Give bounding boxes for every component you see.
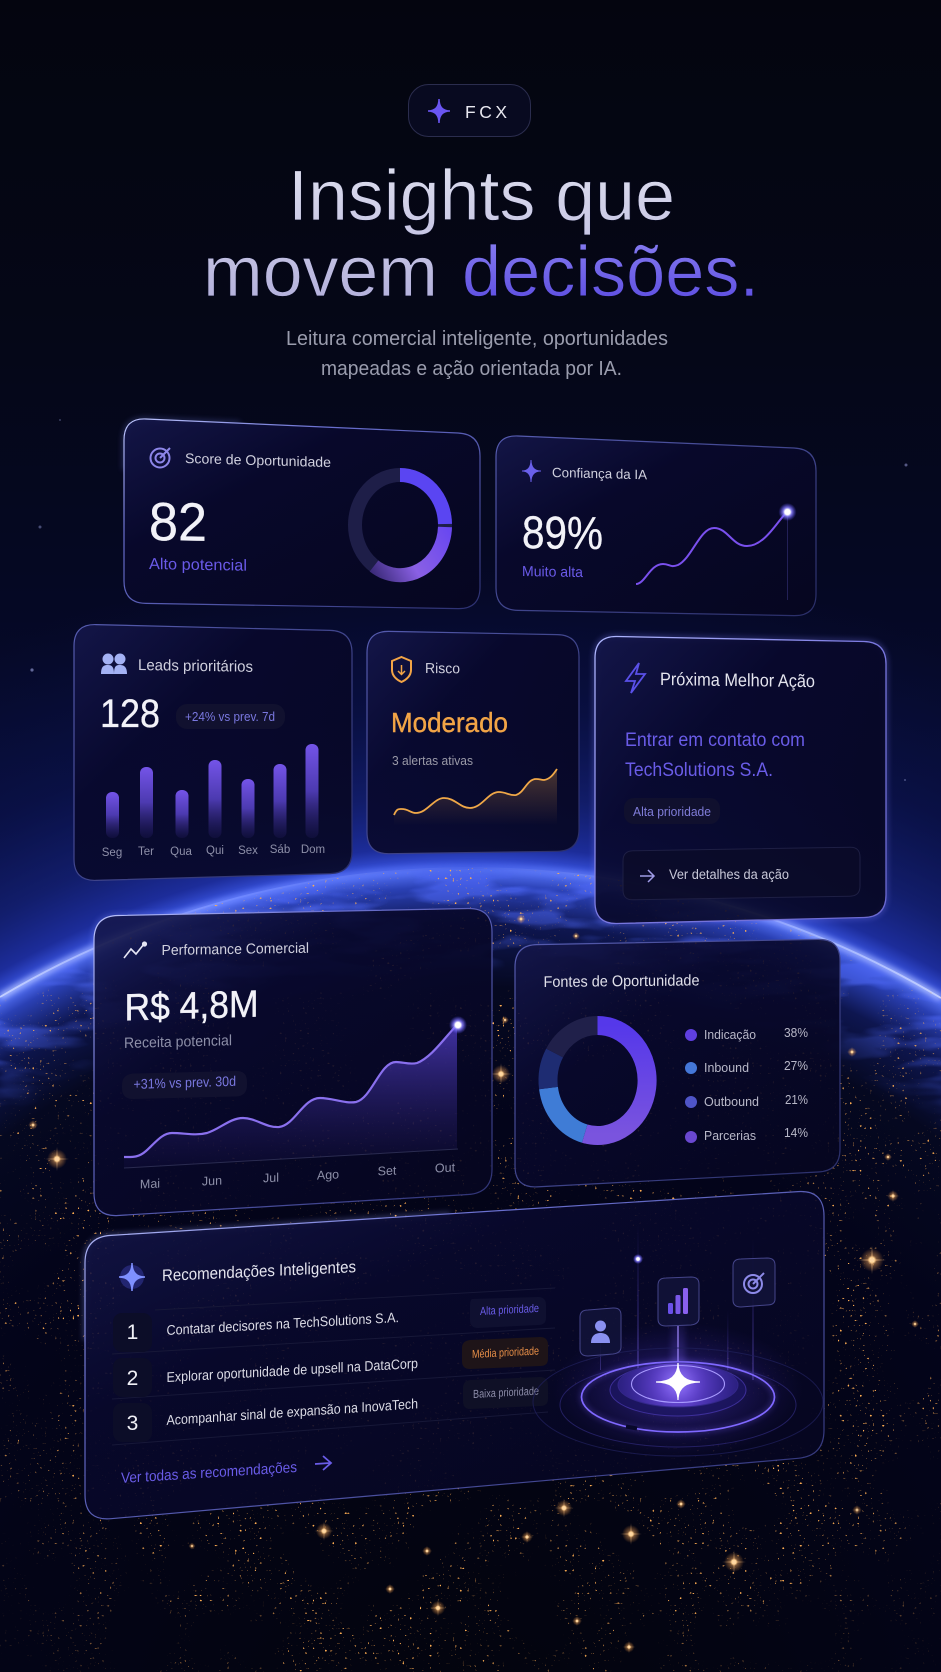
legend: Parcerias [704, 1128, 756, 1143]
earth globe [0, 868, 941, 1672]
action button [623, 847, 860, 900]
priority pill [624, 798, 720, 824]
status: Alto potencial [149, 556, 247, 575]
heading: Risco [425, 661, 460, 677]
icon: sparkle [428, 99, 450, 123]
legend: 14% [784, 1125, 808, 1140]
area chart [124, 1016, 467, 1168]
icon: sparkle badge [119, 1263, 145, 1291]
background stars [30, 419, 907, 781]
title: movem [203, 233, 438, 312]
recommendation: Entrar em contato com [625, 729, 805, 751]
bar labels: Qua [170, 846, 192, 858]
icon tile: person [580, 1308, 621, 1356]
action button: Ver detalhes da ação [669, 867, 789, 882]
legend: 38% [784, 1025, 808, 1040]
icon: lightning [626, 663, 645, 693]
legend: Indicação [704, 1027, 756, 1042]
row 3: 3 [127, 1412, 138, 1435]
growth pill [122, 1071, 247, 1099]
icon: shield [392, 657, 411, 682]
title: Insights que [288, 157, 675, 236]
light beams [600, 1225, 754, 1385]
caption: Receita potencial [124, 1032, 232, 1052]
legend: Inbound [704, 1060, 749, 1075]
panel: confiança da IA [496, 436, 816, 616]
priority pill: Alta prioridade [633, 805, 711, 819]
illustration: glowing platform [533, 1225, 823, 1458]
icon: arrow [640, 870, 654, 882]
row 1 [113, 1297, 546, 1352]
row 3: Baixa prioridade [473, 1386, 539, 1401]
recommendation: TechSolutions S.A. [625, 759, 773, 781]
month labels: Ago [317, 1167, 339, 1183]
row 2: Média prioridade [472, 1345, 539, 1361]
status: Muito alta [522, 564, 584, 581]
line chart [394, 769, 557, 825]
panel: leads prioritários [74, 625, 352, 880]
continent texture near the limb [0, 874, 941, 1112]
glowing dot [633, 1254, 643, 1264]
row dividers [112, 1288, 555, 1445]
icon tile: target [733, 1258, 775, 1307]
subtitle: Leitura comercial inteligente, oportunidades [286, 328, 668, 350]
row 1: 1 [127, 1321, 138, 1344]
bar labels: Seg [102, 847, 122, 859]
growth pill: +24% vs prev. 7d [185, 710, 275, 724]
row 3 [113, 1377, 548, 1442]
month labels: Mai [140, 1176, 160, 1192]
bar labels [102, 844, 325, 859]
panel: fontes de oportunidade [515, 939, 840, 1187]
row 2: Explorar oportunidade de upsell na DataCorp [166, 1355, 418, 1385]
bar labels: Ter [138, 846, 154, 858]
month labels: Jul [263, 1171, 279, 1185]
recommendation [625, 729, 805, 781]
subtitle: mapeadas e ação orientada por IA. [321, 358, 622, 380]
icon: sparkle [522, 460, 541, 482]
row 1: Alta prioridade [480, 1303, 539, 1318]
bar labels: Qui [206, 845, 224, 857]
value: 82 [149, 492, 207, 553]
line chart [636, 503, 796, 600]
heading: Performance Comercial [162, 941, 309, 959]
icon: people [101, 654, 127, 674]
row 2: 2 [127, 1367, 138, 1390]
month labels: Out [435, 1160, 456, 1176]
row 1: Contatar decisores na TechSolutions S.A. [166, 1309, 399, 1338]
growth pill [176, 704, 285, 729]
subtitle [286, 328, 668, 380]
panel: recomendações inteligentes [85, 1192, 824, 1519]
rings [533, 1348, 823, 1456]
value: Moderado [391, 707, 508, 738]
panel: próxima melhor ação [595, 636, 886, 924]
heading: Recomendações Inteligentes [162, 1258, 356, 1285]
bar chart [106, 744, 318, 838]
logo pill [408, 84, 530, 136]
legend: 27% [784, 1058, 808, 1073]
bar labels: Sáb [270, 844, 290, 856]
panel: risco [367, 631, 579, 854]
legend: Outbound [704, 1094, 759, 1109]
month labels: Jun [202, 1173, 222, 1189]
city lights [0, 860, 941, 1672]
icon: trend line [124, 942, 146, 958]
atmosphere glow [0, 500, 941, 1100]
row 3: Acompanhar sinal de expansão na InovaTech [166, 1395, 418, 1428]
donut chart [548, 1026, 647, 1135]
heading: Próxima Melhor Ação [660, 669, 815, 691]
legend: 21% [785, 1092, 808, 1107]
heading: Score de Oportunidade [185, 450, 331, 470]
heading: Fontes de Oportunidade [544, 972, 700, 991]
bar labels: Dom [301, 844, 325, 856]
title: decisões. [462, 233, 759, 312]
month labels [140, 1160, 456, 1192]
title [203, 157, 759, 312]
atmosphere rim [0, 868, 941, 998]
growth pill: +31% vs prev. 30d [134, 1073, 236, 1092]
value: 128 [100, 692, 160, 736]
heading: Confiança da IA [552, 465, 647, 482]
bar labels: Sex [238, 845, 258, 857]
row 2 [113, 1337, 548, 1397]
panel: score de oportunidade [124, 419, 480, 609]
heading: Leads prioritários [138, 657, 253, 676]
donut chart [355, 475, 445, 575]
link: Ver todas as recomendações [121, 1459, 297, 1487]
value: R$ 4,8M [124, 984, 259, 1029]
icon: target [150, 448, 170, 468]
icon: arrow [315, 1456, 331, 1470]
value: 89% [522, 506, 603, 559]
note: 3 alertas ativas [392, 754, 473, 768]
star [656, 1363, 700, 1400]
icon tile: bars [658, 1277, 699, 1326]
panel: performance comercial [94, 908, 492, 1216]
brand name: FCX [465, 102, 510, 122]
legend [685, 1025, 808, 1143]
month labels: Set [378, 1163, 397, 1178]
